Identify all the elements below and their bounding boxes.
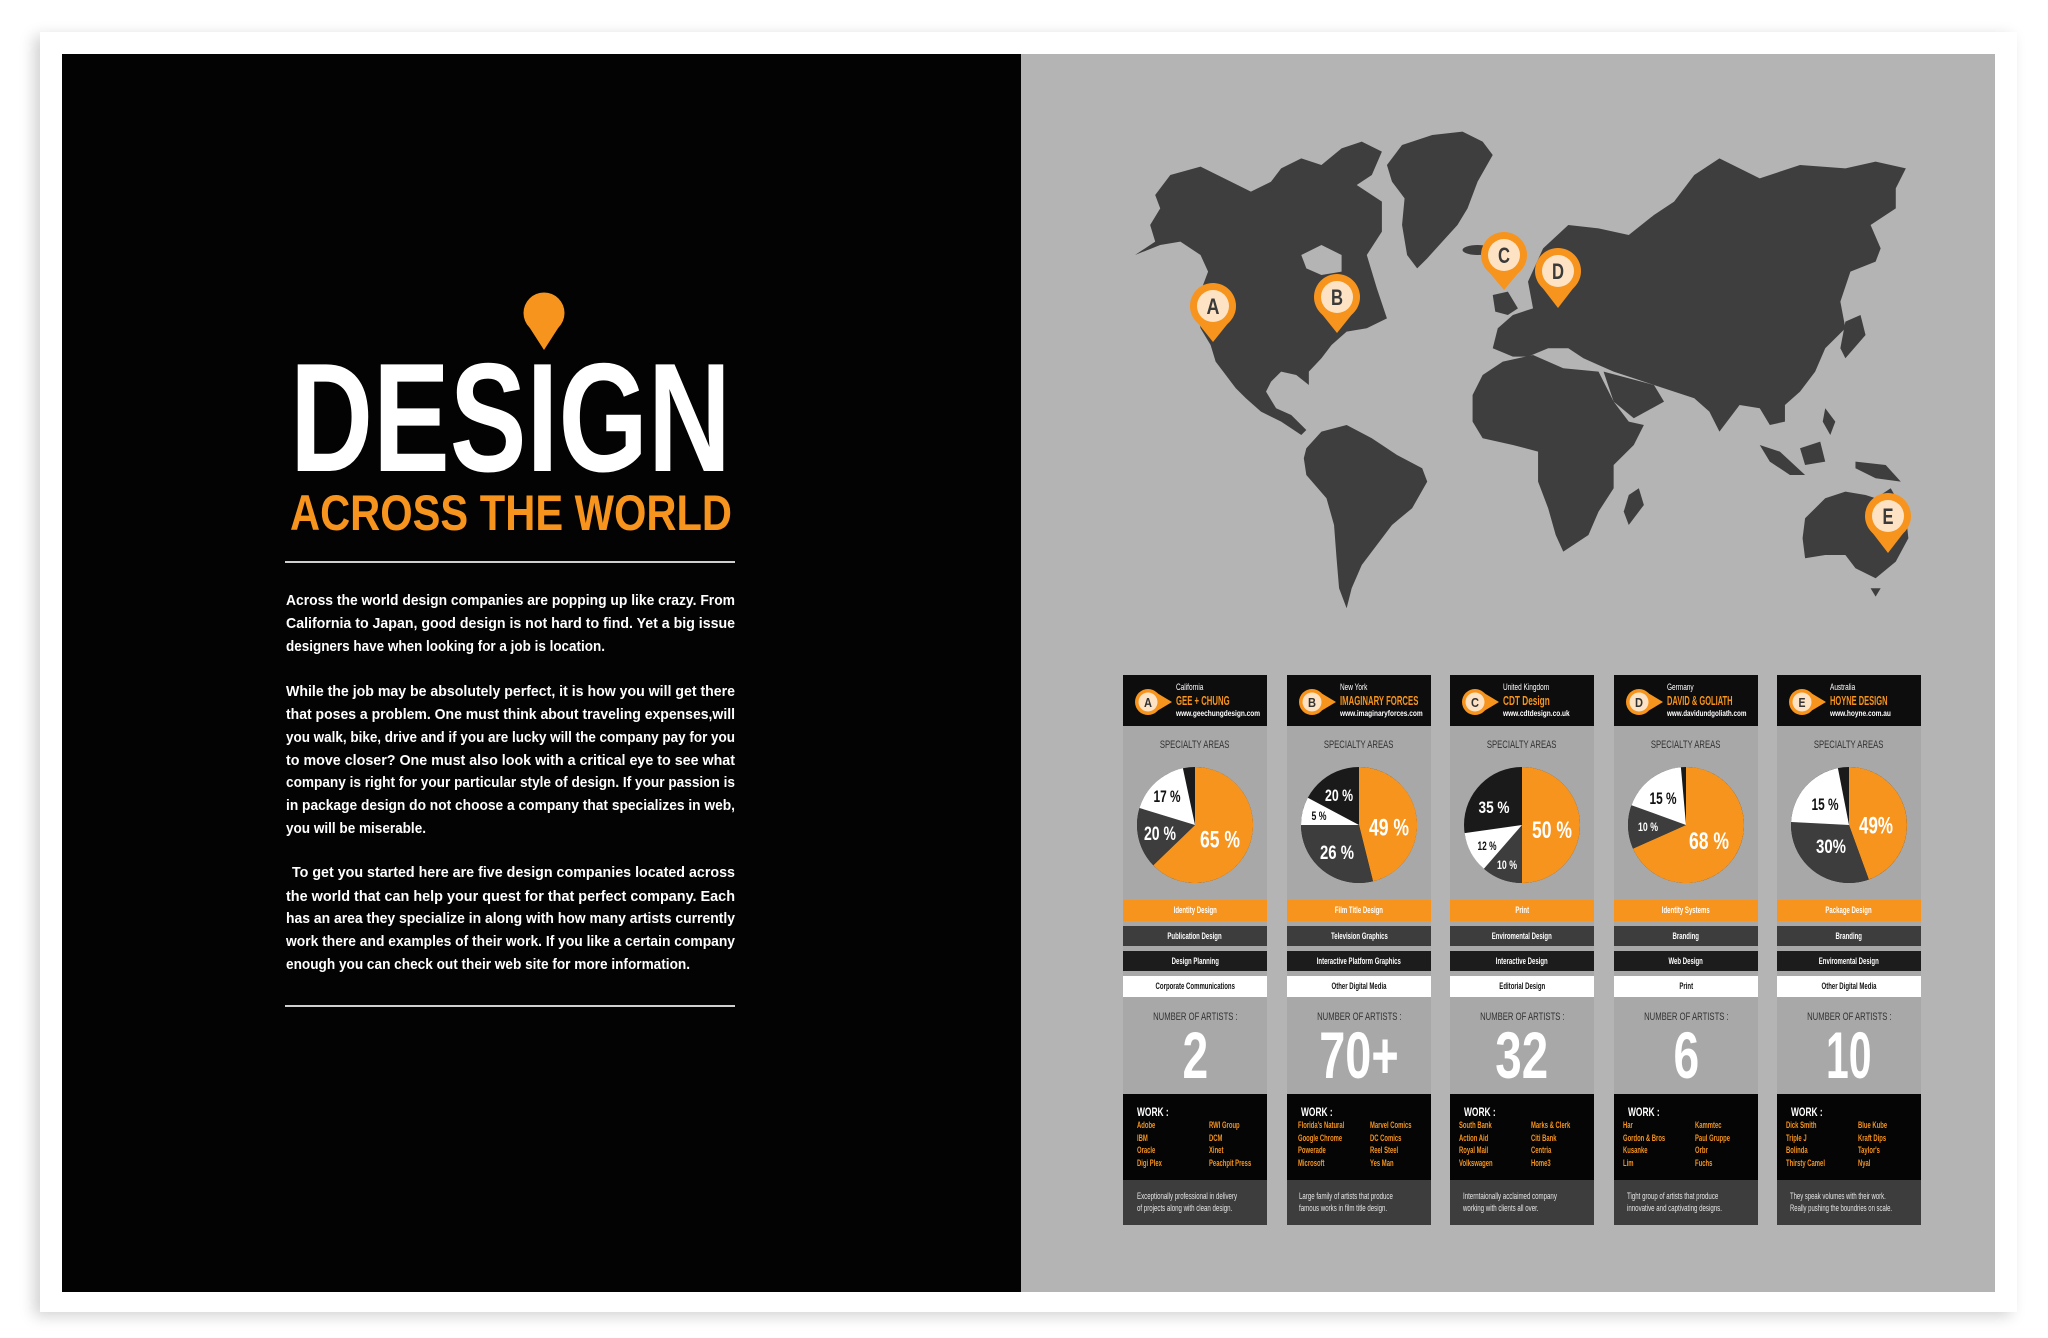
- card A artists number: 2: [1182, 1018, 1208, 1092]
- card C work list: Centria: [1531, 1145, 1551, 1156]
- icon: map pin E: [1865, 493, 1911, 553]
- card A work list: Xinet: [1209, 1145, 1223, 1156]
- panel: grey right page: [1021, 54, 1995, 1292]
- card C header: www.cdtdesign.co.uk: [1503, 708, 1570, 718]
- card D work list: Kusanke: [1623, 1145, 1648, 1156]
- panel: card C: [1450, 675, 1594, 1225]
- card B specialty heading: SPECIALTY AREAS: [1324, 739, 1394, 751]
- card E pie chart: [1791, 767, 1907, 883]
- card E work list: Thirsty Camel: [1786, 1158, 1825, 1168]
- card D pie chart: [1628, 767, 1744, 883]
- card C work list: South Bank: [1459, 1120, 1492, 1131]
- intro text block: [285, 592, 736, 973]
- title: DESIGN: DESIGN: [290, 331, 731, 504]
- card D work list: [1614, 1094, 1758, 1180]
- card A header: California: [1176, 682, 1203, 692]
- icon: map pin C: C: [1498, 243, 1510, 268]
- card A work list: WORK :: [1137, 1105, 1169, 1119]
- card D header: DAVID & GOLIATH: [1667, 694, 1733, 708]
- card C header: CDT Design: [1503, 694, 1550, 708]
- card B footer description: Large family of artists that produce: [1299, 1191, 1393, 1201]
- intro text block: in package design do not choose a company that specializes in web,: [286, 797, 735, 814]
- card A work list: Digi Plex: [1137, 1158, 1162, 1168]
- card C specialty bars: Interactive Design: [1496, 956, 1548, 966]
- card C header: [1450, 675, 1594, 726]
- card E specialty bars: Package Design: [1826, 905, 1872, 915]
- icon: map pin A: [1190, 283, 1236, 342]
- card D header: [1614, 675, 1758, 726]
- card D specialty bars: Identity Systems: [1662, 905, 1710, 915]
- card A specialty bars: Corporate Communications: [1155, 981, 1235, 991]
- card B work list: Reel Steel: [1370, 1145, 1398, 1156]
- card E artists number: 10: [1826, 1018, 1872, 1092]
- intro text block: California to Japan, good design is not hard to find. Yet a big issue: [286, 615, 735, 632]
- card B pie chart: 20 %: [1325, 786, 1353, 805]
- card D specialty heading: SPECIALTY AREAS: [1651, 739, 1721, 751]
- card A specialty bars: [1123, 900, 1267, 997]
- card A specialty heading: SPECIALTY AREAS: [1160, 739, 1230, 751]
- card A work list: Adobe: [1137, 1120, 1155, 1131]
- card A header: GEE + CHUNG: [1176, 694, 1230, 708]
- panel: card A: [1123, 675, 1267, 1225]
- card D header: www.davidundgoliath.com: [1667, 708, 1746, 718]
- card D header: Germany: [1667, 682, 1694, 692]
- panel: card E: [1777, 675, 1921, 1225]
- card D work list: Gordon & Bros: [1623, 1132, 1665, 1144]
- card C pie chart: 10 %: [1497, 858, 1517, 872]
- card B pie chart: 5 %: [1312, 809, 1327, 823]
- icon: map pin A: A: [1206, 294, 1220, 319]
- intro text block: work there and examples of their work. If you like a certain company: [285, 933, 736, 950]
- card E work list: Blue Kube: [1858, 1120, 1887, 1131]
- intro text block: Across the world design companies are popping up like crazy. From: [286, 592, 735, 609]
- card A footer description: Exceptionally professional in delivery: [1137, 1191, 1237, 1201]
- card D specialty bars: Print: [1679, 981, 1693, 991]
- panel: black left page: [62, 54, 1021, 1292]
- card D work list: Lim: [1623, 1158, 1633, 1168]
- card E header: E: [1798, 695, 1806, 710]
- card E footer description: Really pushing the boundries on scale.: [1790, 1203, 1892, 1213]
- intro text block: enough you can check out their web site for more information.: [286, 956, 690, 973]
- intro text block: you walk, bike, drive and if you are lucky will the company pay for you: [286, 729, 735, 746]
- card B header: www.imaginaryforces.com: [1340, 708, 1423, 718]
- intro text block: to move closer? One must also look with a critical eye to see what: [286, 752, 735, 769]
- card D pie chart: 68 %: [1689, 828, 1729, 855]
- card B work list: Florida's Natural: [1298, 1120, 1344, 1131]
- card A work list: DCM: [1209, 1132, 1222, 1144]
- top rule: [285, 561, 735, 563]
- card B work list: Google Chrome: [1298, 1132, 1342, 1144]
- icon: map pin C: [1481, 232, 1527, 290]
- card C work list: Marks & Clerk: [1531, 1120, 1570, 1131]
- card D work list: Orbr: [1695, 1145, 1708, 1156]
- intro text block: designers have when looking for a job is location.: [286, 638, 605, 655]
- card D footer description: innovative and captivating designs.: [1627, 1203, 1722, 1213]
- card B work list: DC Comics: [1370, 1132, 1401, 1144]
- card A specialty bars: Design Planning: [1171, 956, 1219, 966]
- card B artists number: 70+: [1319, 1018, 1399, 1092]
- card C work list: Volkswagen: [1459, 1158, 1493, 1168]
- card C pie chart: 12 %: [1478, 839, 1497, 853]
- card C pie chart: 35 %: [1478, 798, 1510, 817]
- intro text block: To get you started here are five design companies located across: [292, 864, 735, 881]
- intro text block: the world that can help your quest for that perfect company. Each: [286, 888, 735, 905]
- card C work list: WORK :: [1464, 1105, 1496, 1119]
- card E header: www.hoyne.com.au: [1830, 708, 1891, 718]
- card C header: United Kingdom: [1503, 682, 1549, 692]
- card D specialty bars: Web Design: [1669, 956, 1703, 966]
- card E work list: Dick Smith: [1786, 1120, 1816, 1131]
- card D work list: Paul Gruppe: [1695, 1132, 1730, 1144]
- card A specialty bars: Publication Design: [1168, 931, 1222, 941]
- card B footer description: famous works in film title design.: [1299, 1203, 1387, 1213]
- card B header: IMAGINARY FORCES: [1340, 694, 1418, 708]
- card D artists number: 6: [1673, 1018, 1699, 1092]
- intro text block: has an area they specialize in along with how many artists currently: [286, 910, 736, 927]
- card E header: Australia: [1830, 682, 1855, 692]
- card D work list: WORK :: [1628, 1105, 1660, 1119]
- card B pie chart: 26 %: [1320, 843, 1354, 864]
- card A footer description: [1123, 1180, 1267, 1225]
- card D pie chart: 15 %: [1650, 789, 1676, 808]
- card D work list: Fuchs: [1695, 1158, 1712, 1168]
- icon: map pin E: E: [1882, 504, 1894, 529]
- card C artists number: 32: [1496, 1018, 1548, 1092]
- card C artists label: NUMBER OF ARTISTS :: [1480, 1011, 1564, 1023]
- card E specialty bars: Other Digital Media: [1822, 981, 1876, 991]
- card E pie chart: 30%: [1816, 837, 1846, 858]
- card B header: B: [1308, 695, 1316, 710]
- card E work list: [1777, 1094, 1921, 1180]
- card D footer description: Tight group of artists that produce: [1627, 1191, 1718, 1201]
- card A work list: Oracle: [1137, 1145, 1155, 1156]
- card A header: www.geechungdesign.com: [1176, 708, 1260, 718]
- intro text block: you will be miserable.: [286, 820, 426, 837]
- card B specialty bars: Interactive Platform Graphics: [1317, 956, 1401, 966]
- card A header: [1123, 675, 1267, 726]
- card A header: A: [1144, 695, 1153, 710]
- card B specialty bars: Film Title Design: [1335, 905, 1383, 915]
- card B work list: Microsoft: [1298, 1158, 1325, 1168]
- card C specialty bars: Editorial Design: [1499, 981, 1545, 991]
- card D specialty bars: Branding: [1673, 931, 1699, 941]
- card C header: C: [1471, 695, 1480, 710]
- card C work list: [1450, 1094, 1594, 1180]
- card D footer description: [1614, 1180, 1758, 1225]
- card E pie chart: 15 %: [1812, 795, 1838, 814]
- bottom rule: [285, 1005, 735, 1007]
- icon: map pin B: [1314, 274, 1360, 333]
- card C work list: Royal Mail: [1459, 1145, 1488, 1156]
- subtitle: across the world: ACROSS THE WORLD: [290, 485, 732, 541]
- card C pie chart: [1464, 767, 1580, 883]
- card B work list: [1287, 1094, 1431, 1180]
- card B work list: Powerade: [1298, 1145, 1326, 1156]
- icon: map pin D: D: [1552, 259, 1564, 284]
- card E work list: Nyal: [1858, 1158, 1870, 1168]
- icon: headline pin: [524, 292, 564, 350]
- card C work list: Home3: [1531, 1158, 1551, 1168]
- card B work list: Marvel Comics: [1370, 1120, 1412, 1131]
- card A specialty bars: Identity Design: [1173, 905, 1217, 915]
- card E specialty bars: Enviromental Design: [1819, 956, 1879, 966]
- card C footer description: Interntaionally acclaimed company: [1463, 1191, 1557, 1201]
- intro text block: While the job may be absolutely perfect, it is how you will get there: [286, 683, 735, 700]
- card E pie chart: 49%: [1859, 812, 1893, 840]
- card D artists label: NUMBER OF ARTISTS :: [1644, 1011, 1728, 1023]
- card C work list: Citi Bank: [1531, 1132, 1557, 1144]
- card A work list: IBM: [1137, 1132, 1148, 1144]
- card B specialty bars: Other Digital Media: [1332, 981, 1386, 991]
- card B header: New York: [1340, 682, 1367, 692]
- card A work list: [1123, 1094, 1267, 1180]
- card E work list: WORK :: [1791, 1105, 1823, 1119]
- card A work list: RWI Group: [1209, 1120, 1240, 1131]
- card A pie chart: [1137, 767, 1253, 883]
- card E work list: Kraft Dips: [1858, 1132, 1886, 1144]
- card C specialty bars: [1450, 900, 1594, 997]
- card E header: HOYNE DESIGN: [1830, 694, 1888, 708]
- card C footer description: [1450, 1180, 1594, 1225]
- card E work list: Taylor's: [1858, 1145, 1880, 1156]
- card B specialty bars: Television Graphics: [1331, 931, 1387, 941]
- card B footer description: [1287, 1180, 1431, 1225]
- card B work list: Yes Man: [1370, 1158, 1394, 1168]
- card C specialty bars: Print: [1515, 905, 1529, 915]
- card D header: D: [1635, 695, 1643, 710]
- card E specialty bars: [1777, 900, 1921, 997]
- intro text block: company is right for your particular style of design. If your passion is: [286, 774, 735, 791]
- card C specialty heading: SPECIALTY AREAS: [1487, 739, 1557, 751]
- world map: [1135, 132, 1908, 608]
- card D specialty bars: [1614, 900, 1758, 997]
- card E specialty heading: SPECIALTY AREAS: [1814, 739, 1884, 751]
- card E header: [1777, 675, 1921, 726]
- card A pie chart: 17 %: [1154, 787, 1180, 806]
- card A pie chart: 20 %: [1144, 824, 1176, 845]
- intro text block: that poses a problem. One must think about traveling expenses,will: [286, 706, 735, 723]
- card D work list: Har: [1623, 1120, 1633, 1131]
- card E artists label: NUMBER OF ARTISTS :: [1807, 1011, 1891, 1023]
- icon: map pin B: B: [1331, 285, 1343, 310]
- card E work list: Triple J: [1786, 1132, 1807, 1144]
- card E specialty bars: Branding: [1836, 931, 1862, 941]
- card B artists label: NUMBER OF ARTISTS :: [1317, 1011, 1401, 1023]
- card E footer description: [1777, 1180, 1921, 1225]
- card D work list: Kammtec: [1695, 1120, 1722, 1131]
- card B header: [1287, 675, 1431, 726]
- panel: card B: [1287, 675, 1431, 1225]
- card C specialty bars: Enviromental Design: [1492, 931, 1552, 941]
- card E work list: Bolinda: [1786, 1145, 1808, 1156]
- card D pie chart: 10 %: [1638, 820, 1658, 834]
- icon: map pin D: [1535, 248, 1581, 308]
- card A artists label: NUMBER OF ARTISTS :: [1153, 1011, 1237, 1023]
- card C work list: Action Aid: [1459, 1132, 1488, 1144]
- card C footer description: working with clients all over.: [1463, 1203, 1539, 1213]
- card B pie chart: [1301, 767, 1417, 883]
- panel: card D: [1614, 675, 1758, 1225]
- card E footer description: They speak volumes with their work.: [1790, 1191, 1886, 1201]
- card B work list: WORK :: [1301, 1105, 1333, 1119]
- card A work list: Peachpit Press: [1209, 1158, 1251, 1168]
- card B specialty bars: [1287, 900, 1431, 997]
- card A footer description: of projects along with clean design.: [1137, 1203, 1232, 1213]
